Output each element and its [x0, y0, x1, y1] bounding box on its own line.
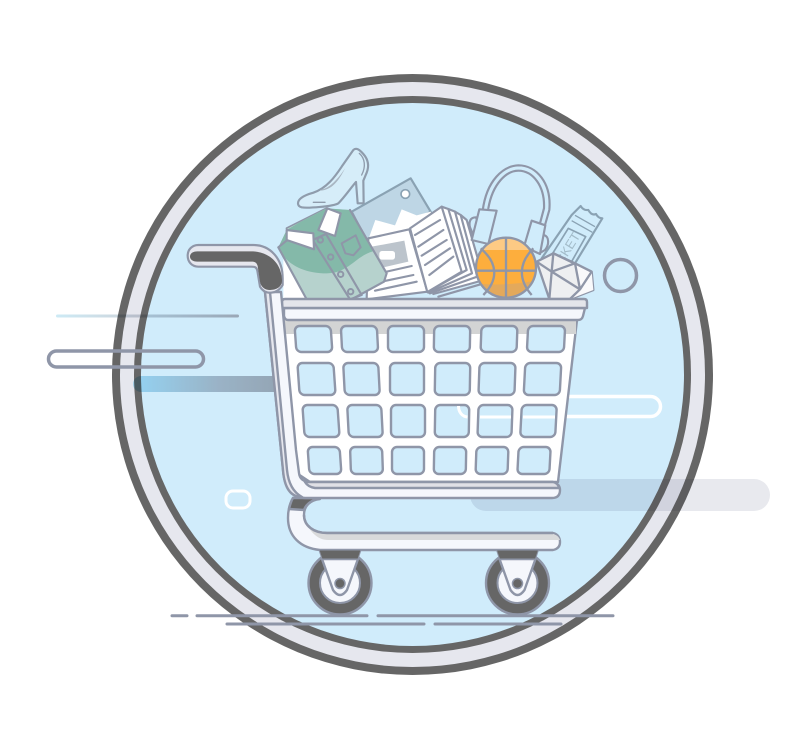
icon: ticket: TICKET: [546, 230, 583, 277]
icon: diamond: [537, 253, 593, 299]
small ring: [604, 260, 636, 292]
speed band: right grey: [470, 479, 770, 511]
basket grey shadow strip: [284, 320, 576, 334]
cart basket: [283, 320, 577, 482]
cart lower frame: [288, 498, 560, 550]
icon: book: [367, 207, 484, 299]
speed pill: left outline: [48, 351, 204, 367]
cart post and bottom rail: [265, 292, 560, 498]
left wheel: [308, 550, 372, 614]
shopping cart illustration: [46, 74, 770, 675]
speed line: top left: [56, 314, 239, 318]
basket rim: [282, 299, 587, 320]
speed pill: right white outline: [458, 396, 660, 416]
ground lines: [172, 616, 613, 624]
white pill seen through basket holes: [458, 406, 555, 417]
basket holes: [295, 326, 565, 474]
icon: basketball: [473, 236, 540, 300]
circular background badge: [112, 74, 713, 675]
small white pill: [226, 491, 250, 508]
speed band: left gradient: [133, 376, 290, 392]
icon: headphones: [470, 165, 550, 254]
icon: shirt: [277, 207, 388, 298]
icon: glass shoe: [298, 149, 368, 208]
icon: ticket: [542, 206, 602, 277]
icon: white paper behind shirt: [283, 258, 304, 298]
right wheel: [486, 550, 549, 614]
shopping goods: [270, 149, 550, 299]
icon: picture card: [352, 177, 432, 238]
cart handle: [188, 245, 283, 293]
